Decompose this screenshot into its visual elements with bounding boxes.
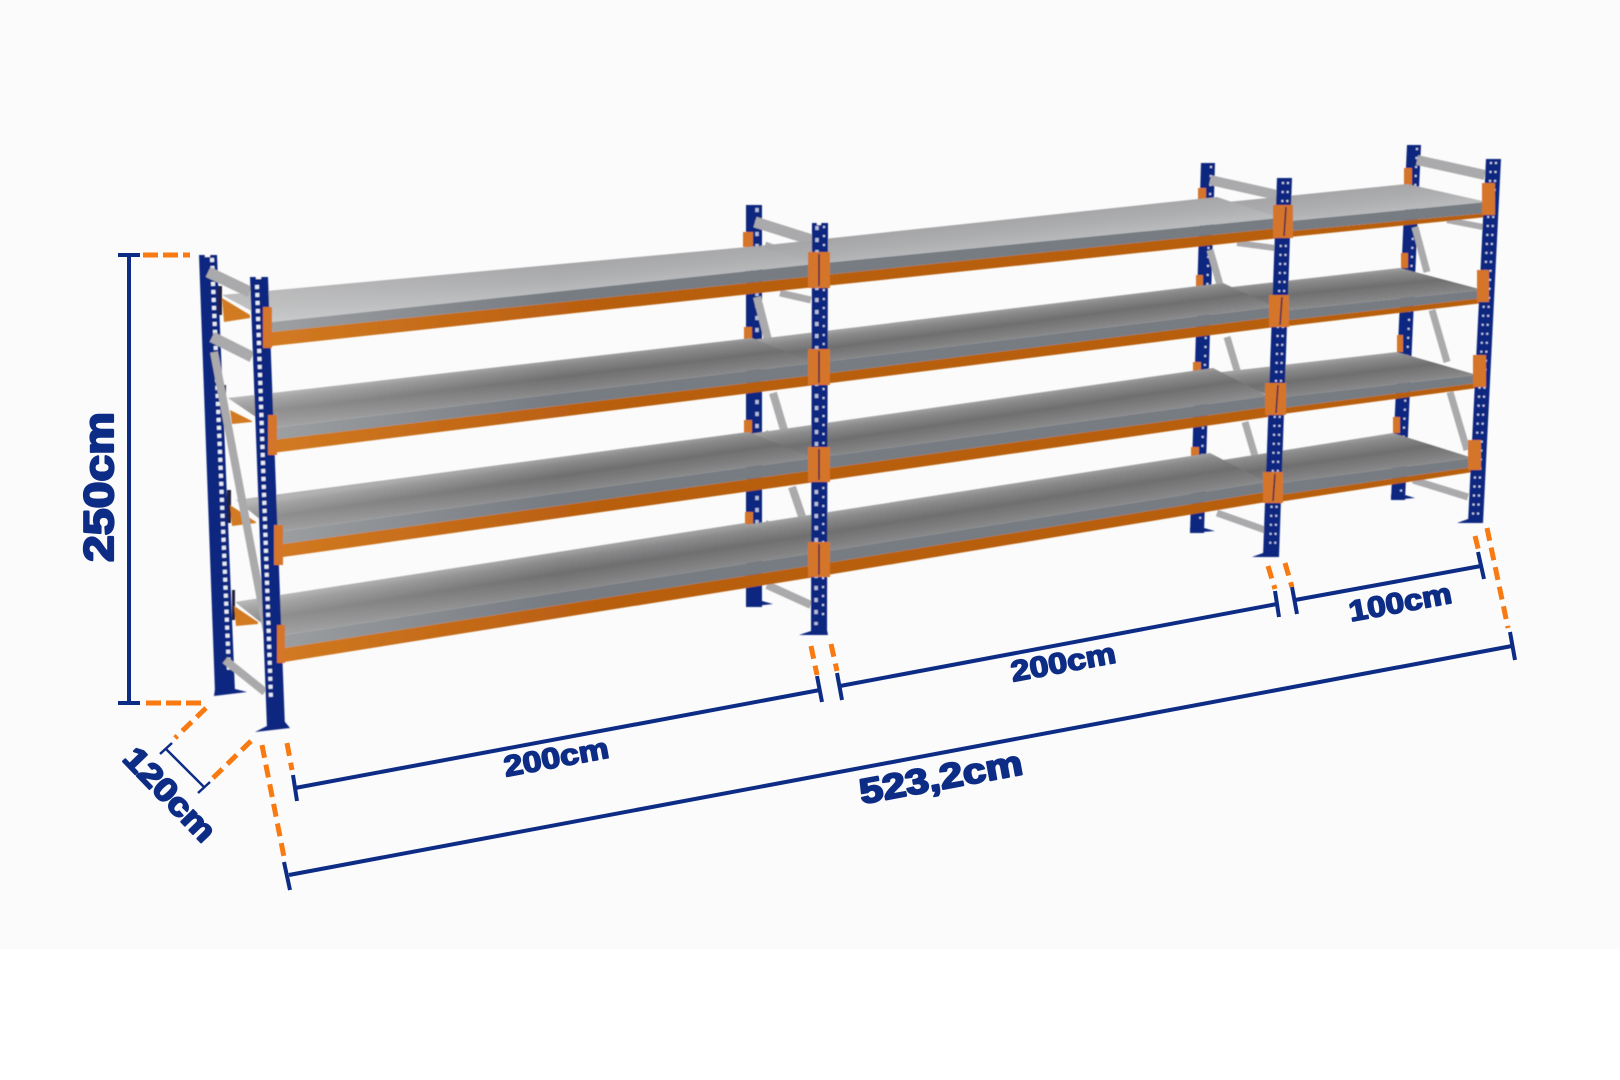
width dimension 100cm — [1285, 536, 1484, 628]
height dimension 250cm: 250cm — [75, 412, 122, 562]
width dimension 200cm left: 200cm — [501, 733, 611, 784]
width dimension 200cm middle — [831, 566, 1279, 700]
total width dimension 523,2cm: 523,2cm — [856, 743, 1026, 812]
depth dimension 120cm — [116, 708, 251, 849]
section 3: 100cm bay — [1210, 184, 1487, 503]
width dimension 200cm left — [287, 646, 822, 801]
width dimension 100cm: 100cm — [1346, 578, 1454, 628]
section 1: left 200cm bay — [222, 246, 815, 663]
grey braces and rails — [755, 160, 1485, 605]
front bracket plates — [263, 183, 1495, 663]
width dimension 200cm middle: 200cm — [1008, 638, 1118, 689]
back bracket plates — [743, 168, 1412, 527]
back uprights — [199, 145, 1421, 696]
section 2: middle 200cm bay — [745, 197, 1280, 577]
depth dimension 120cm: 120cm — [116, 740, 223, 849]
shelving rack — [199, 145, 1501, 732]
left frame braces — [208, 272, 267, 692]
joint seams — [819, 207, 1286, 575]
front uprights — [250, 159, 1501, 732]
total width dimension 523,2cm — [262, 528, 1515, 890]
